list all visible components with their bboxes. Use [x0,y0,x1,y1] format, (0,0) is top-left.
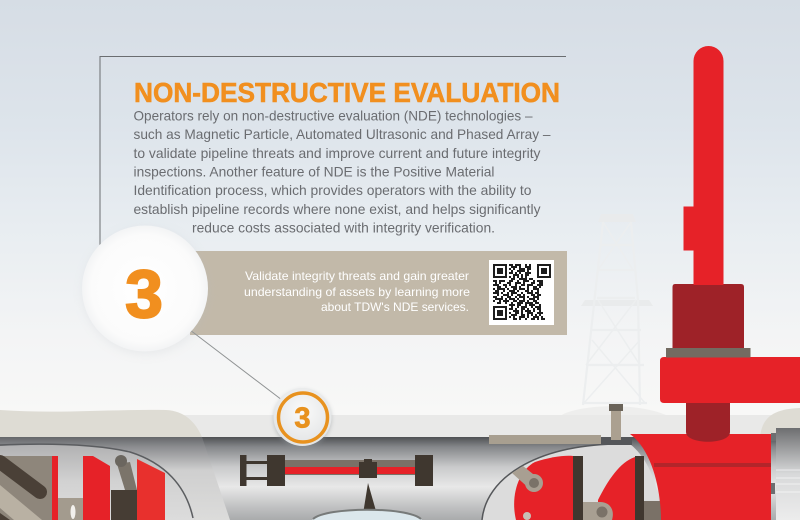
leader line [190,330,282,400]
left housing wedge [0,437,230,520]
sky background [0,0,800,416]
right beige housing [760,408,800,440]
text block: body copy: to validate pipeline threats and improve current and future integrity [134,145,540,161]
bottom viewing lens [312,510,422,520]
callout text [244,269,470,314]
red stem [694,46,724,285]
callout text: understanding of assets by learning more [244,285,470,299]
text block: body copy: reduce costs associated with integrity verification. [192,220,495,236]
text block: body copy: inspections. Another feature of NDE is the Positive Material [134,164,494,180]
red yoke bar [660,357,800,403]
callout banner [190,251,567,335]
text block: body copy: Identification process, which provides operators with the ability to [134,182,532,198]
QR code [489,260,554,325]
valve lower body [630,434,771,520]
panel: intro frame lines [100,56,566,245]
red valve assembly [630,46,800,520]
left hatch [0,444,195,520]
number badge: small 3: 3 [294,402,311,434]
right ribbed pipe section [771,428,800,520]
internal grey assembly [0,456,52,520]
valve neck [686,400,730,442]
text block: body copy: establish pipeline records where none exist, and helps significantly [134,201,540,217]
dark fitting on pipe [601,437,632,445]
red hatch panels [514,456,635,520]
dark vertical bars [573,456,644,520]
heading: NON-DESTRUCTIVE EVALUATION [134,77,560,108]
body seam [654,463,771,467]
tan flange plate [489,435,601,444]
left housing cap [0,410,202,437]
inspection tool [240,455,433,518]
text block: body copy: Operators rely on non-destructive evaluation (NDE) technologies – [134,108,533,124]
text block: body copy: such as Magnetic Particle, Automated Ultrasonic and Phased Array – [134,126,551,142]
text block: body copy [134,108,551,236]
hatch linkage arms [512,466,661,520]
number badge: large 3: 3 [125,256,163,332]
icon: faint oil derrick [581,214,653,405]
dark red actuator block [672,284,744,348]
number badge: large 3 [82,226,209,354]
distant horizon mound [560,406,668,416]
right hatch [482,444,661,520]
valve bolt [609,404,623,440]
callout text: about TDW's NDE services. [321,300,469,314]
ground band [0,415,800,438]
pipeline body [0,437,800,520]
number badge: small 3 [274,388,332,448]
grey collar [666,348,750,358]
red panels [52,456,165,520]
stem side tab [684,206,694,250]
dark mechanism block [111,455,137,520]
callout text: Validate integrity threats and gain greater [245,269,469,283]
